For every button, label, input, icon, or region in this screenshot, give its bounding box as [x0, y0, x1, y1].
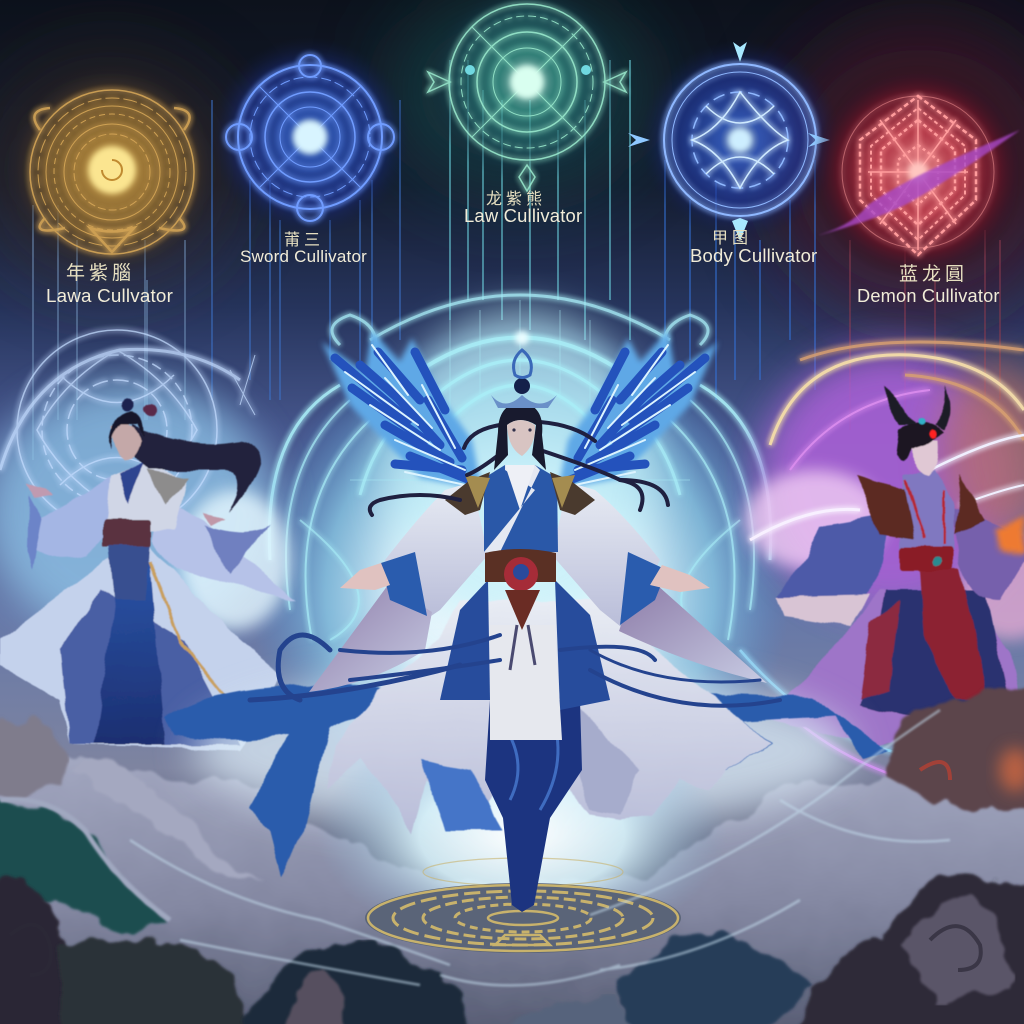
sleeves: [385, 482, 488, 620]
hands: [340, 563, 390, 590]
label: Demon Cultivator: [857, 263, 1000, 306]
energy rings: centre: [250, 295, 790, 860]
torso: [484, 465, 558, 552]
right figure magenta glow and rings: [740, 342, 1024, 800]
emblem: red demon: [808, 64, 1024, 280]
foreground waves and clouds: [0, 710, 1024, 1024]
left figure torso: [105, 462, 187, 530]
label: Lawa Cultivator: [46, 262, 173, 306]
crown: [491, 331, 557, 408]
dark blue leg: [485, 700, 582, 912]
hair strands: [370, 422, 668, 515]
left figure sleeves: [28, 478, 112, 558]
left figure mandala and glow: [0, 330, 290, 640]
skirt panels: [440, 580, 490, 700]
right figure lower robe: [770, 590, 1024, 745]
label: Demon Cultivator: Demon Cullivator: [857, 286, 1000, 306]
left wing: [322, 330, 482, 490]
left figure: [0, 399, 296, 750]
floor seal: [365, 858, 681, 953]
right wing: [558, 330, 718, 490]
emblem: teal law: [427, 0, 627, 191]
label: Sword Cultivator: 莆三: [284, 231, 324, 249]
label: Sword Cultivator: [240, 231, 367, 266]
left figure head: [112, 424, 142, 460]
ribbon and cape right: [640, 690, 889, 770]
emblem: blue body: [628, 40, 840, 241]
central figure: [165, 330, 889, 912]
label: Demon Cultivator: 蓝龙圓: [899, 263, 968, 285]
hair and head: [494, 402, 546, 470]
right figure: [770, 385, 1024, 745]
left figure hands: [25, 482, 52, 498]
label: Sword Cultivator: Sword Cullivator: [240, 247, 367, 266]
ribbon and cape left: [165, 684, 400, 877]
lower robe: [327, 600, 771, 835]
label: Lawa Cultivator: Lawa Cullvator: [46, 285, 173, 306]
right figure sleeves: [776, 513, 890, 610]
label: Law Cultivator: Law Cullivator: [464, 205, 582, 226]
label: Law Cultivator: [464, 190, 582, 226]
left figure outer robe: [0, 545, 280, 750]
label: Body Cultivator: [690, 230, 817, 266]
label: Law Cultivator: 龙紫熊: [486, 190, 546, 208]
emblem: gold law: [7, 65, 217, 275]
label: Body Cultivator: Body Cullivator: [690, 245, 817, 266]
belt: [485, 549, 556, 582]
left figure hair: [130, 425, 262, 512]
label: Body Cultivator: 甲图: [712, 230, 752, 247]
mist and clouds: [0, 670, 1024, 1024]
vertical light beams: [33, 60, 1000, 460]
right figure head and horns: [908, 440, 938, 475]
label: Lawa Cultivator: 年紫腦: [66, 262, 135, 284]
emblem: blue sword: [210, 37, 410, 237]
right figure torso: [900, 470, 955, 550]
thin ribbons: [250, 635, 780, 706]
